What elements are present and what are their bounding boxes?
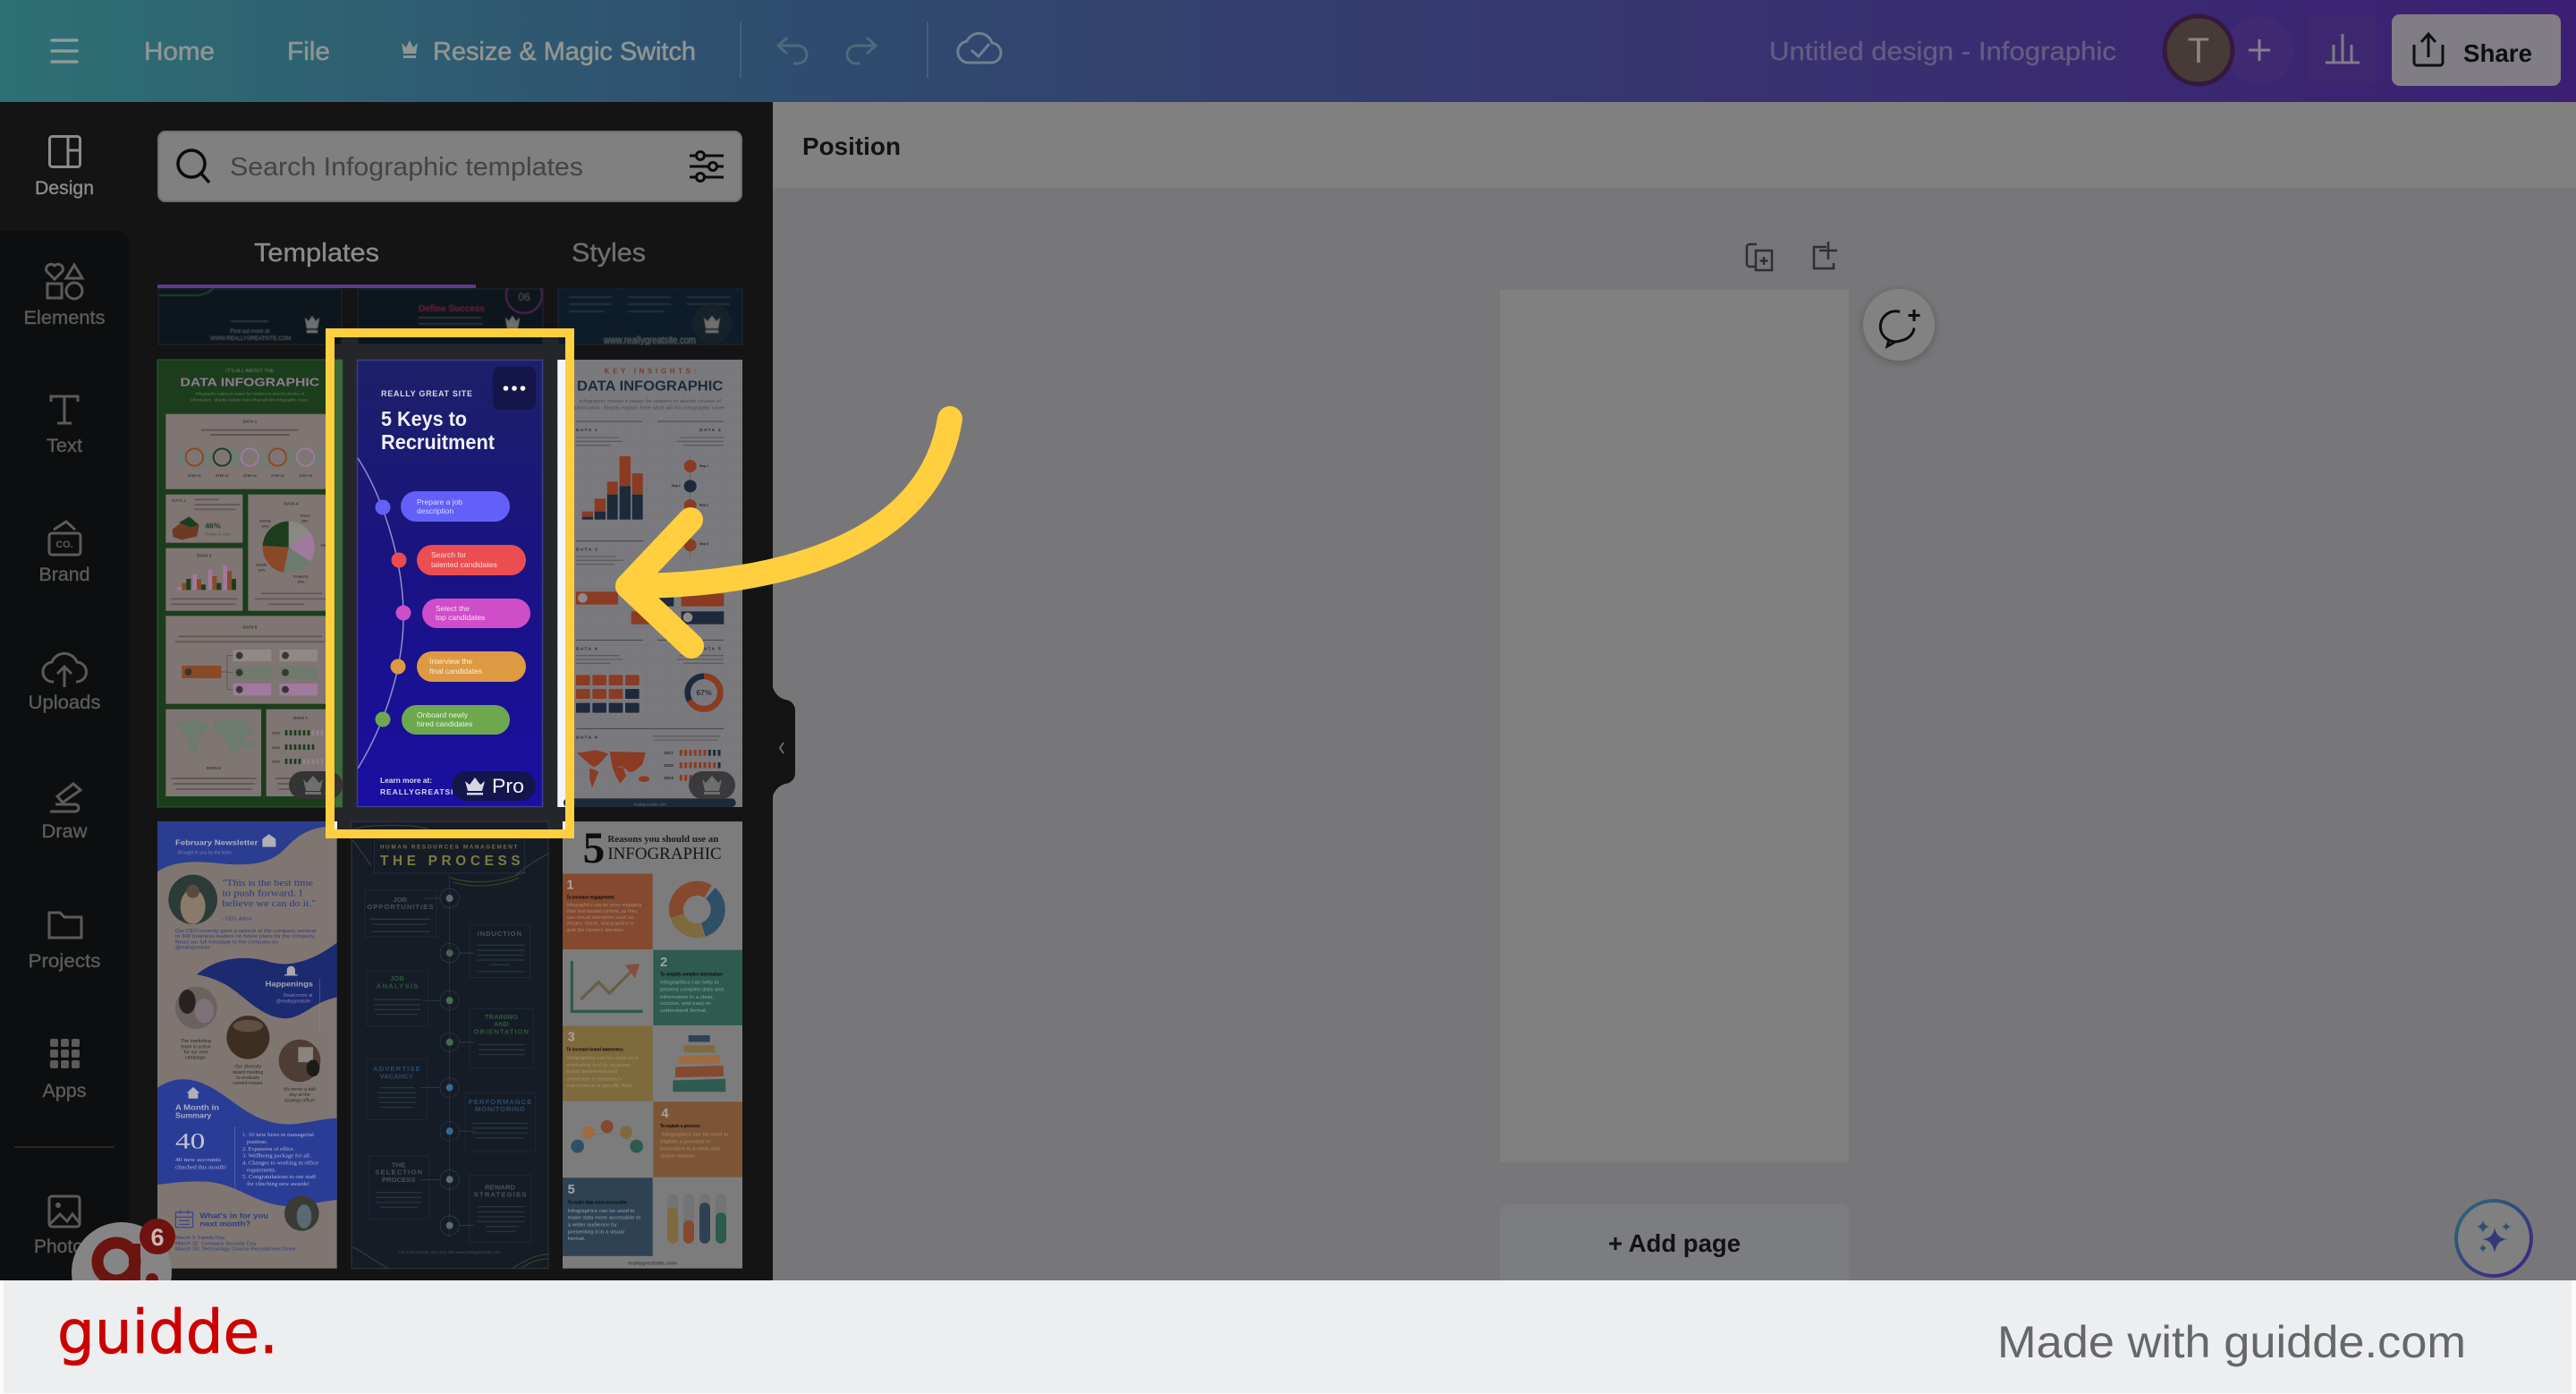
- top navigation bar: [0, 0, 2576, 102]
- template: green data infographic: 2019: [272, 731, 281, 735]
- avatar: [2165, 16, 2233, 84]
- tabs: [157, 239, 646, 288]
- template: february newsletter: @reallygreatsite: [276, 999, 310, 1005]
- card heading: Recruitment: [381, 430, 495, 454]
- step 5: [376, 705, 510, 735]
- badge: pro: [452, 771, 536, 801]
- template: five reasons infographic: marketing tool to increase: [566, 1063, 631, 1068]
- step 2: talented candidates: [431, 560, 497, 569]
- template: green data infographic: 2020: [272, 745, 281, 750]
- template: key insights data infographic: Step 2: [672, 484, 681, 488]
- template: february newsletter: A Month in: [175, 1104, 219, 1112]
- template: february newsletter: Happenings: [266, 980, 314, 988]
- template: five reasons infographic: format.: [568, 1237, 586, 1242]
- button: magic sparkle: [2456, 1201, 2531, 1276]
- template: february newsletter: next month?: [199, 1220, 250, 1228]
- nav item: design: [35, 136, 94, 199]
- template: february newsletter: Read our full message to the company on: [175, 940, 278, 946]
- page background: canvas area: [773, 102, 2576, 1283]
- template: green data infographic: Family: [259, 518, 272, 523]
- template: five reasons infographic: understand format.: [660, 1008, 708, 1014]
- icon: duplicate page: [1747, 244, 1772, 270]
- nav item: photos: [34, 1196, 92, 1257]
- button: more options: [493, 367, 536, 410]
- template: the process: INDUCTION: [478, 930, 521, 938]
- template: five reasons infographic: concise, and easy-to-: [660, 1001, 713, 1007]
- step 2: Search for: [431, 550, 466, 559]
- nav item: draw: Draw: [41, 821, 88, 842]
- template: five reasons infographic: reallygreatsite.com: [628, 1262, 678, 1267]
- template: february newsletter: strategy office!: [284, 1098, 315, 1103]
- search placeholder: Search Infographic templates: [230, 153, 583, 182]
- template: key insights data infographic: information. Shortly explain here what will this infographic cover.: [573, 406, 726, 412]
- tab: styles: Styles: [572, 239, 646, 268]
- template: green data infographic: 46%: [205, 522, 221, 531]
- template: five reasons infographic: presenting it in a visual: [568, 1229, 624, 1235]
- nav item: projects: [29, 913, 100, 972]
- step 4: final candidates: [429, 667, 482, 676]
- rail: side navigation: [0, 136, 129, 1283]
- nav item: photos: Photos: [34, 1237, 92, 1257]
- badge: crown on key insights template: [689, 771, 735, 799]
- template: green data infographic: Travel: [300, 514, 309, 518]
- template: february newsletter: [157, 821, 337, 1269]
- template: key insights data infographic: 2017: [664, 751, 674, 756]
- template: february newsletter: - CEO, Adoni: [222, 917, 251, 922]
- template: five reasons infographic: than text-based content, as they: [566, 909, 638, 914]
- template: green data infographic: Car: [320, 543, 326, 548]
- template: february newsletter: positions.: [247, 1140, 268, 1145]
- template: february newsletter: believe we can do it.": [222, 899, 316, 909]
- card footer: [380, 776, 487, 796]
- template: key insights data infographic: 67%: [696, 688, 712, 697]
- thumbnail: top middle: [357, 288, 544, 344]
- nav item: apps: Apps: [43, 1081, 86, 1101]
- template: february newsletter: 5. Congratulations to our staff: [242, 1174, 317, 1180]
- template: key insights data infographic: DATA 3: [576, 548, 598, 553]
- nav item: text: Text: [47, 436, 82, 456]
- button: share: Share: [2463, 39, 2532, 67]
- template: five reasons infographic: To increase brand awareness:: [566, 1047, 624, 1052]
- template: the process: For more details, you may visit www.reallygreatsite.com: [398, 1250, 501, 1254]
- icon: search: [178, 150, 209, 183]
- template: five reasons infographic: 2: [660, 956, 667, 970]
- template: five reasons infographic: 4: [661, 1107, 669, 1121]
- template: five reasons infographic: To increase engagement:: [566, 896, 615, 901]
- template: five reasons infographic: 5: [568, 1183, 575, 1197]
- step 1: [376, 491, 510, 522]
- selection highlight behind chosen template: [335, 337, 565, 829]
- template: february newsletter: clinched this month!: [175, 1165, 226, 1170]
- template: five reasons infographic: grab the viewer's attention.: [566, 928, 624, 933]
- template: five reasons infographic: simple manner.: [660, 1153, 696, 1159]
- template: february newsletter: Summary: [175, 1112, 212, 1120]
- nav item: uploads: Uploads: [29, 693, 100, 713]
- template row cut off at top: [157, 288, 743, 345]
- tab: templates: Templates: [254, 239, 379, 268]
- thumbnail: top right: [558, 289, 742, 346]
- template: five reasons infographic: images, charts, and graphics to: [566, 922, 634, 927]
- position toolbar: [773, 102, 2576, 188]
- template: five reasons infographic: make data more accessible to: [568, 1216, 640, 1221]
- button: add comment: [1863, 289, 1935, 361]
- template: february newsletter: Our diversity: [234, 1065, 262, 1070]
- template: five reasons infographic: use visual elements such as: [566, 915, 634, 921]
- template: february newsletter: 3. Wellbeing package for all.: [242, 1153, 311, 1160]
- template: green data infographic: 2024: [272, 759, 281, 763]
- template: five reasons infographic: present complex data and: [660, 988, 724, 993]
- thumbnail: top right: www.reallygreatsite.com: [603, 334, 696, 346]
- footer band: [0, 1280, 2576, 1394]
- nav item: brand: [39, 522, 89, 585]
- template: key insights data infographic: Infographic makes it easier for readers to absorb chunks of: [579, 399, 722, 404]
- nav item: brand: Brand: [39, 565, 89, 585]
- template: green data infographic: Health: [256, 563, 267, 567]
- template: the process: OPPORTUNITIES: [367, 903, 433, 911]
- template: green data infographic: DATA 6: [207, 766, 221, 770]
- card heading: [381, 389, 495, 454]
- template: february newsletter: board meeting: [233, 1070, 263, 1075]
- template: key insights data infographic: Step 5: [699, 542, 708, 546]
- template: key insights data infographic: DATA 1: [576, 428, 598, 433]
- template: february newsletter: 40 new accounts: [175, 1158, 222, 1163]
- step 3: [395, 599, 530, 628]
- nav item: draw: [41, 784, 88, 842]
- template: the process: JOB: [393, 896, 408, 904]
- template: key insights data infographic: Step 1: [699, 464, 708, 468]
- template: green data infographic: Infographic makes it easier for readers to absorb chunks of: [196, 392, 305, 396]
- step 1: Prepare a job: [417, 497, 462, 506]
- template: february newsletter: 4. Changes to working in office: [242, 1160, 318, 1167]
- canvas page: [1500, 290, 1849, 1162]
- template: five reasons infographic: a wider audience by: [568, 1223, 617, 1228]
- template: key insights data infographic: DATA 5: [699, 646, 722, 651]
- thumbnail: top left: WWW.REALLYGREATSITE.COM: [210, 336, 291, 342]
- sidebar panel: [0, 102, 773, 1283]
- template: february newsletter: February Newsletter: [175, 838, 258, 846]
- template: five reasons infographic: information in a clear,: [660, 995, 714, 1000]
- template: green data infographic: 22%: [258, 568, 266, 573]
- template: five reasons infographic: INFOGRAPHIC: [607, 845, 722, 863]
- card footer: Learn more at:: [380, 776, 432, 785]
- thumbnail: top left: [158, 288, 342, 344]
- template: five reasons infographic: Infographics can be used to: [568, 1209, 635, 1214]
- guidde avatar bubble: [72, 1219, 175, 1322]
- template: february newsletter: What's in for you: [199, 1212, 268, 1220]
- template: green data infographic: STEP 05: [299, 474, 312, 478]
- step 1: description: [417, 506, 453, 515]
- template: february newsletter: team in action: [181, 1044, 211, 1050]
- template: february newsletter: 2. Expansion of office.: [242, 1146, 295, 1152]
- badge: crown on green template: [289, 771, 343, 799]
- template: february newsletter: @reallygreatsite.: [175, 946, 211, 951]
- template: five reasons infographic: explain a process or: [660, 1139, 711, 1144]
- template: green data infographic: DATA 5: [242, 625, 258, 629]
- template: key insights data infographic: DATA INFOGRAPHIC: [577, 379, 723, 395]
- template: february newsletter: for our next: [184, 1050, 208, 1055]
- template: green data infographic: information. Shortly explain here what will this infographic cover.: [191, 398, 309, 403]
- template: five reasons infographic: Infographics can help to: [660, 980, 719, 985]
- template: green data infographic: People in USA: [205, 531, 231, 536]
- template: green data infographic: DATA INFOGRAPHIC: [180, 376, 319, 388]
- thumbnail: top left: Find out more at:: [230, 329, 271, 335]
- nav item: elements: Elements: [23, 308, 106, 328]
- nav item: apps: [43, 1039, 86, 1101]
- icon: crown: [402, 40, 418, 58]
- template: key insights data infographic: 2020: [664, 763, 674, 769]
- template: the process: PERFORMANCE: [469, 1098, 531, 1106]
- template: key insights data infographic: reallygreatsite.com: [634, 803, 666, 807]
- template: green data infographic: DATA 7: [293, 716, 308, 720]
- template: the process: THE: [392, 1160, 405, 1169]
- template: key insights data infographic: DATA 2: [699, 428, 722, 433]
- template: february newsletter: - Brought to you by the team: [175, 851, 232, 856]
- nav item: projects: Projects: [29, 951, 100, 972]
- notification badge: 6: [150, 1224, 165, 1251]
- template: key insights data infographic: [557, 360, 742, 807]
- template: the process: REWARD: [485, 1183, 515, 1191]
- template: five reasons infographic: To simplify complex information:: [660, 972, 724, 978]
- template: green data infographic: [157, 360, 343, 807]
- button: add page: [1500, 1204, 1849, 1285]
- template: green data infographic: DATA 2: [172, 498, 186, 503]
- title: untitled design: Untitled design - Infographic: [1769, 38, 2116, 66]
- icon: hamburger menu: [52, 40, 77, 62]
- card heading: 5 Keys to: [381, 407, 467, 430]
- template: february newsletter: It's never a dull: [284, 1087, 316, 1092]
- template: february newsletter: 1. 10 new hires in managerial: [242, 1133, 314, 1138]
- template: february newsletter: "This is the best time: [222, 879, 313, 888]
- template: the process: SELECTION: [375, 1169, 422, 1177]
- template: five reasons infographic: [563, 821, 742, 1269]
- template: the process: THE PROCESS: [380, 854, 521, 869]
- template: the process: ORIENTATION: [474, 1027, 529, 1035]
- tagline: Made with guidde.com: [1997, 1317, 2466, 1367]
- template: february newsletter: March 15: Company Security Day: [175, 1242, 257, 1247]
- step 2: [392, 545, 526, 575]
- template: the process: ANALYSIS: [377, 982, 418, 990]
- template: selected 5 keys to recruitment: [358, 360, 542, 807]
- template: the process: [352, 821, 548, 1269]
- template: key insights data infographic: KEY INSIGHTS:: [605, 367, 696, 375]
- card footer: REALLYGREATSITE.COM: [380, 787, 487, 796]
- menu: home: Home: [144, 38, 215, 66]
- template: key insights data infographic: Step 3: [699, 504, 708, 507]
- template: february newsletter: requirements.: [247, 1168, 276, 1174]
- template: the process: VACANCY: [380, 1072, 414, 1080]
- template: green data infographic: DATA 3: [197, 554, 212, 558]
- template: five reasons infographic: To make data more accessible:: [568, 1200, 628, 1205]
- template: the process: AND: [494, 1020, 509, 1028]
- template: five reasons infographic: To explain a process:: [660, 1124, 701, 1129]
- menu: file: File: [287, 38, 330, 66]
- undimmed slivers inside selection frame: [335, 821, 565, 829]
- panel collapse handle: [773, 687, 795, 796]
- template: green data infographic: 24%: [262, 523, 269, 528]
- template: five reasons infographic: brand awareness and: [566, 1069, 617, 1075]
- template: green data infographic: STEP 02: [216, 474, 229, 478]
- search box: [158, 132, 741, 201]
- template: key insights data infographic: DATA 6: [576, 735, 598, 740]
- template: the process: ADVERTISE: [373, 1065, 420, 1073]
- step 4: Interview the: [429, 657, 472, 666]
- template: february newsletter: campaign.: [185, 1055, 207, 1060]
- template: five reasons infographic: Infographics can be used as a: [566, 1056, 639, 1061]
- nav item: brand: CO.: [55, 540, 73, 550]
- button: add collaborator: [2225, 16, 2293, 84]
- template: february newsletter: The marketing: [181, 1039, 211, 1044]
- template: five reasons infographic: expertise in a specific field.: [566, 1084, 633, 1089]
- template: february newsletter: to push forward. I: [222, 888, 303, 898]
- template: key insights data infographic: DATA 4: [576, 646, 598, 651]
- template: five reasons infographic: 1: [566, 878, 573, 893]
- nav item: text: [47, 396, 82, 456]
- step 5: Onboard newly: [417, 710, 469, 719]
- template: green data infographic: STEP 04: [271, 474, 285, 478]
- template: the process: TRAINING: [485, 1013, 518, 1021]
- card timeline curve: [358, 458, 403, 769]
- thumbnail: top middle: Define Success: [419, 304, 485, 314]
- icon: filter sliders: [690, 152, 724, 181]
- icon: add page: [1814, 242, 1837, 268]
- template: february newsletter: current issues.: [233, 1081, 264, 1086]
- logo: guidde: guidde.: [57, 1297, 278, 1367]
- nav item: uploads: [29, 653, 100, 713]
- arrow: curved yellow pointer: [628, 419, 950, 646]
- template: five reasons infographic: Reasons you should use an: [607, 835, 719, 845]
- step 3: Select the: [436, 604, 470, 613]
- position toolbar: Position: [802, 132, 901, 160]
- template: five reasons infographic: showcase a company's: [566, 1076, 623, 1082]
- template: green data infographic: DATA 4: [284, 501, 299, 506]
- button: add page: + Add page: [1608, 1229, 1741, 1257]
- template: the process: MONITORING: [475, 1105, 525, 1113]
- button: analytics: [2307, 14, 2377, 86]
- template: five reasons infographic: 3: [568, 1030, 575, 1045]
- badge: pro: Pro: [492, 775, 524, 797]
- menu: resize and magic switch: Resize & Magic Switch: [433, 38, 696, 66]
- template: the process: STRATEGIES: [474, 1191, 526, 1199]
- step 4: [390, 651, 526, 682]
- template: five reasons infographic: 5: [583, 823, 605, 872]
- avatar: T: [2188, 31, 2209, 71]
- template: february newsletter: for clinching new awards!: [247, 1181, 309, 1187]
- thumbnail: top middle: 06: [518, 291, 530, 303]
- template: five reasons infographic: Infographics can be more engaging: [566, 903, 642, 908]
- icon: redo: [847, 38, 876, 64]
- template: green data infographic: 20%: [297, 580, 305, 584]
- icon: cloud saved: [958, 33, 1001, 63]
- button: share: [2392, 14, 2561, 86]
- step 3: top candidates: [436, 613, 485, 622]
- nav item: elements: [23, 264, 106, 328]
- template: green data infographic: Property: [293, 574, 309, 579]
- template: the process: HUMAN RESOURCES MANAGEMENT: [380, 844, 517, 851]
- card heading: REALLY GREAT SITE: [381, 389, 472, 398]
- template: green data infographic: DATA 1: [242, 420, 258, 424]
- template: green data infographic: STEP 03: [243, 474, 257, 478]
- template: february newsletter: to evaluate: [236, 1075, 259, 1081]
- yellow selection frame: [330, 333, 570, 834]
- template: green data infographic: STEP 01: [188, 474, 201, 478]
- template: february newsletter: March 20: Technology Course Recruitment Drive: [175, 1247, 295, 1253]
- step 5: hired candidates: [417, 719, 472, 728]
- template: green data infographic: IT'S ALL ABOUT THE: [225, 369, 275, 374]
- nav item: design: Design: [35, 178, 94, 199]
- icon: undo: [778, 38, 807, 64]
- template: february newsletter: to 300 business leaders on future plans for the company.: [175, 934, 316, 939]
- template: february newsletter: 40: [175, 1129, 205, 1154]
- template: february newsletter: day at the: [289, 1092, 310, 1098]
- template: the process: PROCESS: [382, 1176, 415, 1184]
- template: february newsletter: March 3: Family Day: [175, 1236, 225, 1241]
- template: february newsletter: Read more at: [284, 993, 313, 999]
- template: five reasons infographic: Infographics can be used to: [661, 1133, 728, 1138]
- template: february newsletter: Our CEO recently gave a speech at the company seminar: [175, 929, 317, 934]
- template: green data infographic: 18%: [301, 519, 309, 523]
- template: key insights data infographic: 2023: [664, 776, 674, 781]
- template: five reasons infographic: procedure in a clear and: [660, 1146, 720, 1152]
- template: the process: JOB: [390, 974, 404, 982]
